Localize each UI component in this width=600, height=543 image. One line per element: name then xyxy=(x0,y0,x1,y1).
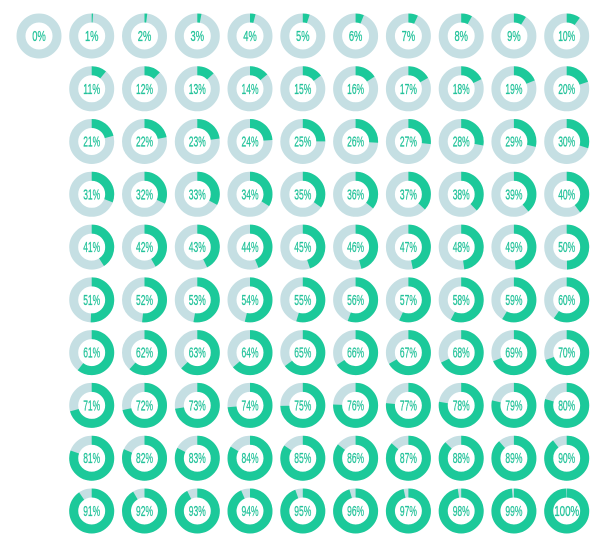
gauge 56% xyxy=(338,282,374,318)
gauge 87%: 87% xyxy=(400,451,417,467)
gauge 39%: 39% xyxy=(505,187,522,203)
gauge 68% xyxy=(443,335,479,371)
gauge 18% xyxy=(443,71,479,107)
gauge 27%: 27% xyxy=(400,134,417,150)
row 61-70% xyxy=(74,335,585,371)
gauge 15%: 15% xyxy=(294,82,311,98)
gauge 44% xyxy=(232,229,268,265)
gauge 34% xyxy=(232,176,268,212)
gauge 96% xyxy=(338,493,374,529)
row 81-90% xyxy=(74,440,585,476)
gauge 56%: 56% xyxy=(347,293,364,309)
gauge 91% xyxy=(74,493,110,529)
gauge 13%: 13% xyxy=(189,82,206,98)
row 0-10% xyxy=(21,18,585,54)
gauge 10% xyxy=(549,18,585,54)
gauge 40% xyxy=(549,176,585,212)
gauge 34%: 34% xyxy=(242,187,259,203)
gauge 31%: 31% xyxy=(83,187,100,203)
gauge 7% xyxy=(390,18,426,54)
gauge 10%: 10% xyxy=(558,29,575,45)
gauge 66%: 66% xyxy=(347,346,364,362)
gauge 94% xyxy=(232,493,268,529)
gauge 37%: 37% xyxy=(400,187,417,203)
gauge 89% xyxy=(496,440,532,476)
row 21-30% xyxy=(74,124,585,160)
gauge 21%: 21% xyxy=(83,134,100,150)
gauge 26% xyxy=(338,124,374,160)
gauge 99% xyxy=(496,493,532,529)
gauge 64% xyxy=(232,335,268,371)
gauge 20% xyxy=(549,71,585,107)
gauge 93% xyxy=(179,493,215,529)
gauge 30%: 30% xyxy=(558,134,575,150)
gauge 88%: 88% xyxy=(453,451,470,467)
gauge 59% xyxy=(496,282,532,318)
gauge 77% xyxy=(390,387,426,423)
gauge 6%: 6% xyxy=(349,29,362,45)
gauge 92% xyxy=(126,493,162,529)
gauge 55%: 55% xyxy=(294,293,311,309)
gauge 84%: 84% xyxy=(242,451,259,467)
gauge 86% xyxy=(338,440,374,476)
row 11-20% xyxy=(74,71,585,107)
gauge 27% xyxy=(390,124,426,160)
gauge 64%: 64% xyxy=(242,346,259,362)
row 41-50% xyxy=(74,229,585,265)
gauge 29% xyxy=(496,124,532,160)
gauge 77%: 77% xyxy=(400,398,417,414)
gauge 85%: 85% xyxy=(294,451,311,467)
gauge 60%: 60% xyxy=(558,293,575,309)
gauge 70% xyxy=(549,335,585,371)
gauge 12% xyxy=(126,71,162,107)
gauge 31% xyxy=(74,176,110,212)
gauge 8% xyxy=(443,18,479,54)
gauge 3% xyxy=(179,18,215,54)
gauge 94%: 94% xyxy=(242,504,259,520)
gauge 7%: 7% xyxy=(402,29,415,45)
gauge 98% xyxy=(443,493,479,529)
gauge 33% xyxy=(179,176,215,212)
gauge 87% xyxy=(390,440,426,476)
gauge 52%: 52% xyxy=(136,293,153,309)
gauge 95% xyxy=(285,493,321,529)
gauge 53% xyxy=(179,282,215,318)
gauge 58%: 58% xyxy=(453,293,470,309)
gauge 98%: 98% xyxy=(453,504,470,520)
gauge 91%: 91% xyxy=(83,504,100,520)
gauge 48%: 48% xyxy=(453,240,470,256)
gauge 12%: 12% xyxy=(136,82,153,98)
gauge 17%: 17% xyxy=(400,82,417,98)
gauge 28% xyxy=(443,124,479,160)
gauge 4% xyxy=(232,18,268,54)
gauge 9% xyxy=(496,18,532,54)
gauge 79%: 79% xyxy=(505,398,522,414)
gauge 44%: 44% xyxy=(242,240,259,256)
gauge 43%: 43% xyxy=(189,240,206,256)
gauge 78%: 78% xyxy=(453,398,470,414)
row 51-60% xyxy=(74,282,585,318)
gauge 73%: 73% xyxy=(189,398,206,414)
gauge 63% xyxy=(179,335,215,371)
gauge 72%: 72% xyxy=(136,398,153,414)
gauge 32% xyxy=(126,176,162,212)
gauge 19%: 19% xyxy=(505,82,522,98)
gauge 0% xyxy=(21,18,57,54)
gauge 86%: 86% xyxy=(347,451,364,467)
gauge 60% xyxy=(549,282,585,318)
gauge 50% xyxy=(549,229,585,265)
gauge 75%: 75% xyxy=(294,398,311,414)
gauge 13% xyxy=(179,71,215,107)
gauge 35% xyxy=(285,176,321,212)
gauge 95%: 95% xyxy=(294,504,311,520)
gauge 63%: 63% xyxy=(189,346,206,362)
gauge 89%: 89% xyxy=(505,451,522,467)
gauge 41% xyxy=(74,229,110,265)
gauge 22% xyxy=(126,124,162,160)
gauge 18%: 18% xyxy=(453,82,470,98)
gauge 46% xyxy=(338,229,374,265)
gauge 16% xyxy=(338,71,374,107)
gauge 11%: 11% xyxy=(83,82,100,98)
gauge 24%: 24% xyxy=(242,134,259,150)
gauge 82% xyxy=(126,440,162,476)
gauge 70%: 70% xyxy=(558,346,575,362)
gauge 68%: 68% xyxy=(453,346,470,362)
gauge 81%: 81% xyxy=(83,451,100,467)
gauge 84% xyxy=(232,440,268,476)
gauge 57% xyxy=(390,282,426,318)
gauge 47% xyxy=(390,229,426,265)
gauge 61%: 61% xyxy=(83,346,100,362)
gauge 39% xyxy=(496,176,532,212)
gauge 85% xyxy=(285,440,321,476)
gauge 72% xyxy=(126,387,162,423)
gauge 100%: 100% xyxy=(554,504,579,520)
gauge 82%: 82% xyxy=(136,451,153,467)
gauge 32%: 32% xyxy=(136,187,153,203)
gauge 88% xyxy=(443,440,479,476)
gauge 1% xyxy=(74,18,110,54)
gauge 38%: 38% xyxy=(453,187,470,203)
gauge 54%: 54% xyxy=(242,293,259,309)
gauge 38% xyxy=(443,176,479,212)
gauge 75% xyxy=(285,387,321,423)
gauge 78% xyxy=(443,387,479,423)
gauge 5%: 5% xyxy=(296,29,310,45)
gauge 97%: 97% xyxy=(400,504,417,520)
gauge 59%: 59% xyxy=(505,293,522,309)
gauge 100% xyxy=(549,493,585,529)
gauge 46%: 46% xyxy=(347,240,364,256)
gauge 79% xyxy=(496,387,532,423)
gauge 35%: 35% xyxy=(294,187,311,203)
gauge 65%: 65% xyxy=(294,346,311,362)
gauge 62% xyxy=(126,335,162,371)
gauge 8%: 8% xyxy=(454,29,468,45)
gauge 61% xyxy=(74,335,110,371)
gauge 25% xyxy=(285,124,321,160)
gauge 71%: 71% xyxy=(83,398,100,414)
gauge 90%: 90% xyxy=(558,451,575,467)
gauge 2%: 2% xyxy=(138,29,151,45)
gauge 90% xyxy=(549,440,585,476)
gauge 23%: 23% xyxy=(189,134,206,150)
row 71-80% xyxy=(74,387,585,423)
gauge 0%: 0% xyxy=(32,29,46,45)
gauge 41%: 41% xyxy=(83,240,100,256)
gauge 20%: 20% xyxy=(558,82,575,98)
gauge 62%: 62% xyxy=(136,346,153,362)
gauge 49%: 49% xyxy=(505,240,522,256)
gauge 36%: 36% xyxy=(347,187,364,203)
gauge 71% xyxy=(74,387,110,423)
gauge 40%: 40% xyxy=(558,187,575,203)
gauge 83% xyxy=(179,440,215,476)
gauge 54% xyxy=(232,282,268,318)
gauge 47%: 47% xyxy=(400,240,417,256)
gauge 67% xyxy=(390,335,426,371)
gauge 6% xyxy=(338,18,374,54)
gauge 99%: 99% xyxy=(505,504,522,520)
row 31-40% xyxy=(74,176,585,212)
gauge 57%: 57% xyxy=(400,293,417,309)
gauge 45% xyxy=(285,229,321,265)
gauge 3%: 3% xyxy=(191,29,204,45)
gauge 16%: 16% xyxy=(347,82,364,98)
gauge 9%: 9% xyxy=(507,29,521,45)
gauge 1%: 1% xyxy=(85,29,99,45)
gauge 83%: 83% xyxy=(189,451,206,467)
gauge 5% xyxy=(285,18,321,54)
gauge 30% xyxy=(549,124,585,160)
gauge 74%: 74% xyxy=(242,398,259,414)
gauge 66% xyxy=(338,335,374,371)
gauge 50%: 50% xyxy=(558,240,575,256)
gauge 14% xyxy=(232,71,268,107)
gauge 65% xyxy=(285,335,321,371)
gauge 22%: 22% xyxy=(136,134,153,150)
row 91-100% xyxy=(74,493,585,529)
gauge 49% xyxy=(496,229,532,265)
gauge 76% xyxy=(338,387,374,423)
gauge 80% xyxy=(549,387,585,423)
gauge 74% xyxy=(232,387,268,423)
gauge 80%: 80% xyxy=(558,398,575,414)
gauge 81% xyxy=(74,440,110,476)
gauge 11% xyxy=(74,71,110,107)
gauge 55% xyxy=(285,282,321,318)
gauge 29%: 29% xyxy=(505,134,522,150)
gauge 21% xyxy=(74,124,110,160)
gauge 28%: 28% xyxy=(453,134,470,150)
gauge 97% xyxy=(390,493,426,529)
gauge 42%: 42% xyxy=(136,240,153,256)
gauge 24% xyxy=(232,124,268,160)
gauge 92%: 92% xyxy=(136,504,153,520)
gauge 15% xyxy=(285,71,321,107)
gauge 19% xyxy=(496,71,532,107)
gauge 69% xyxy=(496,335,532,371)
gauge 25%: 25% xyxy=(294,134,311,150)
gauge 17% xyxy=(390,71,426,107)
gauge 4%: 4% xyxy=(243,29,257,45)
gauge 93%: 93% xyxy=(189,504,206,520)
gauge 69%: 69% xyxy=(505,346,522,362)
gauge 73% xyxy=(179,387,215,423)
gauge 37% xyxy=(390,176,426,212)
gauge 2% xyxy=(126,18,162,54)
gauge 52% xyxy=(126,282,162,318)
gauge 43% xyxy=(179,229,215,265)
gauge 96%: 96% xyxy=(347,504,364,520)
gauge 45%: 45% xyxy=(294,240,311,256)
gauge 36% xyxy=(338,176,374,212)
gauge 14%: 14% xyxy=(242,82,259,98)
gauge 67%: 67% xyxy=(400,346,417,362)
gauge 53%: 53% xyxy=(189,293,206,309)
gauge 42% xyxy=(126,229,162,265)
gauge 51%: 51% xyxy=(83,293,100,309)
gauge 58% xyxy=(443,282,479,318)
gauge 76%: 76% xyxy=(347,398,364,414)
gauge 33%: 33% xyxy=(189,187,206,203)
gauge 48% xyxy=(443,229,479,265)
gauge 51% xyxy=(74,282,110,318)
gauge 23% xyxy=(179,124,215,160)
gauge 26%: 26% xyxy=(347,134,364,150)
